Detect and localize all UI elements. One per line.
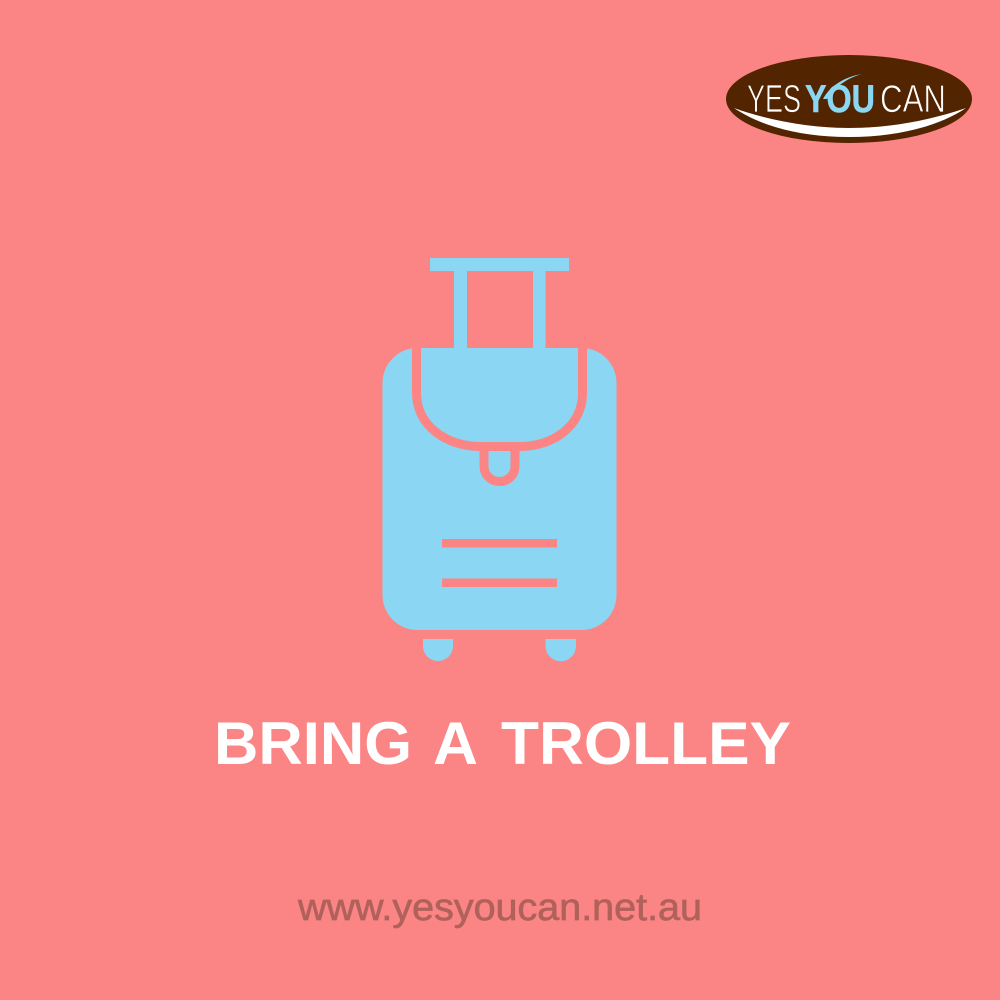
title: [214, 709, 791, 777]
logo: Yes You Can: YOU: [805, 78, 875, 121]
logo: Yes You Can: CAN: [880, 78, 946, 121]
title: TROLLEY: [501, 709, 791, 777]
icon: flap tab: [484, 447, 515, 482]
icon: front flap: [416, 347, 582, 446]
icon: trolley suitcase: [382, 258, 616, 661]
icon: suitcase body: [382, 348, 616, 630]
title: A: [433, 709, 478, 777]
website url: www.yesyoucan.net.au: [297, 887, 702, 929]
icon: pocket lines: [442, 539, 557, 587]
logo: Yes You Can: [726, 55, 972, 143]
title: BRING: [214, 709, 412, 777]
icon: left wheel: [423, 639, 453, 661]
icon: right wheel: [546, 639, 576, 661]
logo: Yes You Can: YES: [747, 78, 801, 121]
icon: telescopic handle: [430, 258, 569, 349]
